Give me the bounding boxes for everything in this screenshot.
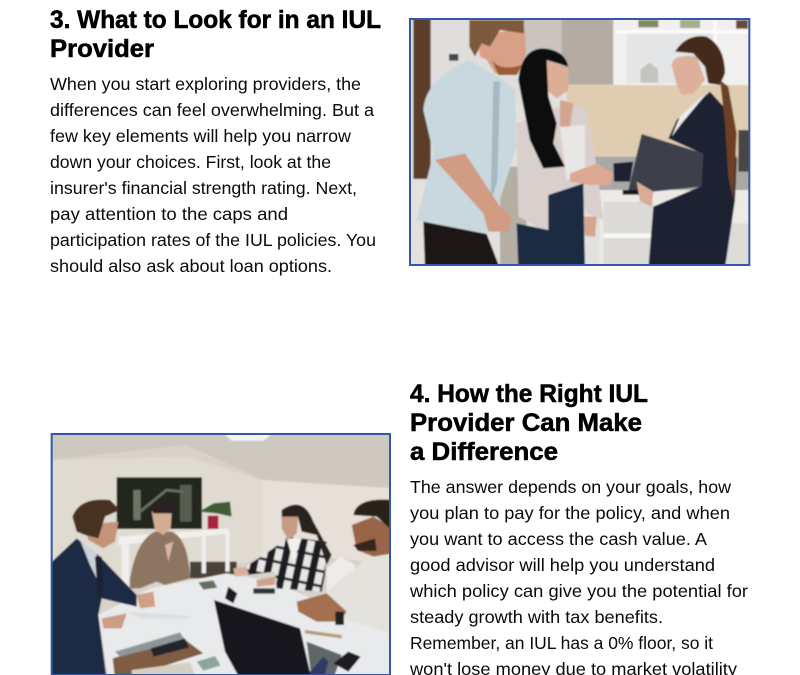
heading: section 3: Provider xyxy=(50,35,154,63)
text block: section 4 body: steady growth with tax benefits. xyxy=(410,607,663,627)
woman xyxy=(517,103,603,233)
text block: section 4 body: you plan to pay for the policy, and when xyxy=(410,503,730,523)
text block: section 4 body: The answer depends on your goals, how xyxy=(410,477,731,497)
text block: section 3 body: participation rates of the IUL policies. You xyxy=(50,230,376,250)
text block: section 3 body: insurer's financial strength rating. Next, xyxy=(50,178,357,198)
man on right xyxy=(328,561,389,632)
photo: couple shaking hands with advisor xyxy=(409,18,750,266)
table xyxy=(98,573,393,675)
text block: section 4 body: Remember, an IUL has a 0% floor, so it xyxy=(410,633,713,653)
items on table xyxy=(198,580,217,590)
heading: section 4: a Difference xyxy=(410,438,558,466)
text block: section 4 body xyxy=(409,477,748,675)
text block: section 4 body: which policy can give you the potential for xyxy=(409,581,748,601)
woman in tan xyxy=(130,532,190,588)
text block: section 3 body: should also ask about loan options. xyxy=(50,256,332,276)
heading: section 4: Provider Can Make xyxy=(410,409,642,437)
text block: section 3 body xyxy=(50,74,376,276)
advisor xyxy=(648,92,737,268)
text block: section 4 body: good advisor will help you understand xyxy=(410,555,715,575)
text block: section 3 body: down your choices. First, look at the xyxy=(50,152,331,172)
photo: four colleagues meeting around a table xyxy=(50,433,391,675)
man in navy suit xyxy=(48,538,137,675)
plant xyxy=(199,502,232,517)
heading: section 3: 3. What to Look for in an IUL xyxy=(50,6,381,34)
text block: section 3 body: differences can feel overwhelming. But a xyxy=(50,100,374,120)
man xyxy=(417,60,517,234)
heading: section 4: 4. How the Right IUL xyxy=(410,380,648,408)
monitor xyxy=(117,477,202,529)
text block: section 3 body: few key elements will help you narrow xyxy=(50,126,351,146)
text block: section 3 body: pay attention to the caps and xyxy=(50,204,288,224)
text block: section 3 body: When you start exploring providers, the xyxy=(50,74,361,94)
woman in plaid xyxy=(243,537,327,592)
side table xyxy=(118,528,229,545)
heading: section 4 xyxy=(410,380,648,466)
text block: section 4 body: you want to access the cash value. A xyxy=(410,529,707,549)
heading: section 3 xyxy=(50,6,381,63)
laptop xyxy=(214,600,312,675)
chair xyxy=(326,557,356,594)
